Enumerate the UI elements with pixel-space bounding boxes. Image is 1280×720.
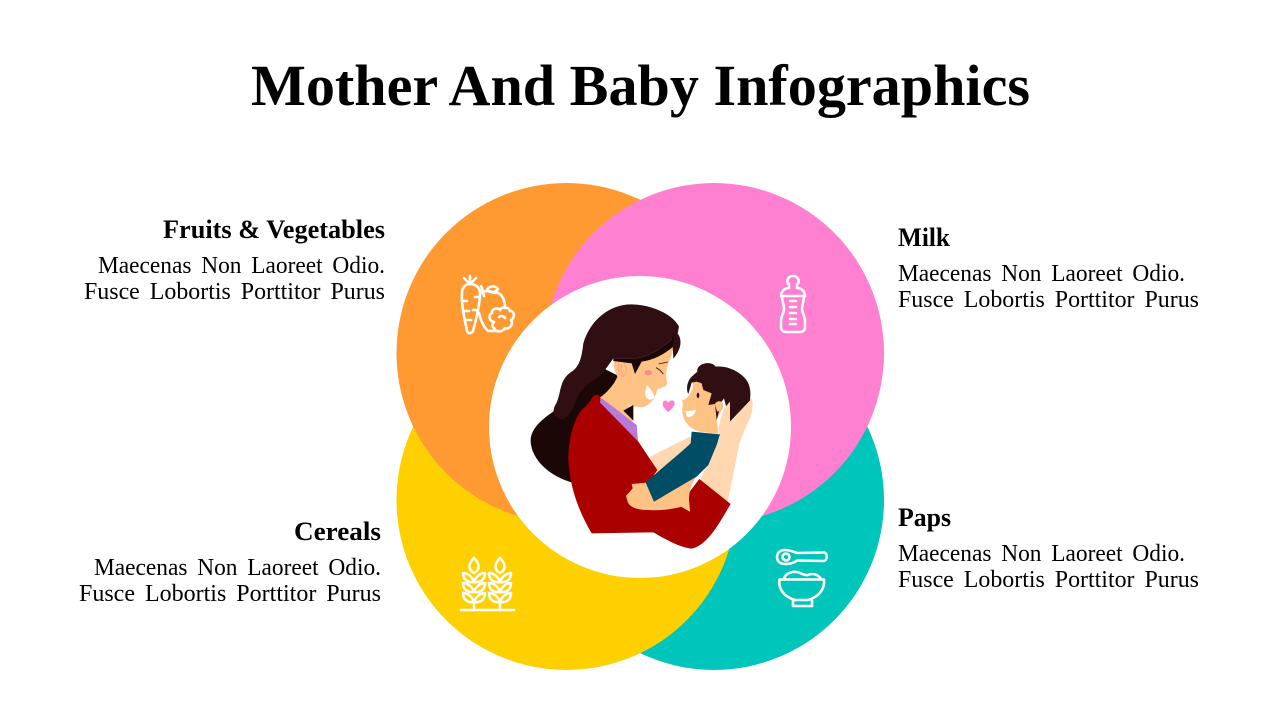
illustration: mother and baby xyxy=(531,304,753,549)
text block: paps: Maecenas Non Laoreet Odio. xyxy=(898,541,1185,567)
circle: milk pink xyxy=(544,183,884,523)
text block: fruits and vegetables: Fusce Lobortis Porttitor Purus xyxy=(84,279,385,305)
text block: milk: Milk xyxy=(898,223,951,252)
text block: fruits and vegetables: Fruits & Vegetables xyxy=(163,215,385,244)
title: Mother And Baby Infographics xyxy=(251,53,1030,118)
text block: fruits and vegetables xyxy=(84,215,385,305)
text block: paps xyxy=(898,503,1199,593)
text block: milk: Fusce Lobortis Porttitor Purus xyxy=(898,287,1199,313)
text block: milk xyxy=(898,223,1199,313)
icon: baby bottle xyxy=(781,276,805,332)
icon: wheat xyxy=(461,558,514,610)
circle: fruits orange xyxy=(396,183,736,523)
circle: cereals yellow xyxy=(396,330,736,670)
text block: cereals xyxy=(79,517,381,607)
text block: fruits and vegetables: Maecenas Non Laoreet Odio. xyxy=(98,253,385,279)
text block: paps: Fusce Lobortis Porttitor Purus xyxy=(898,567,1199,593)
text block: cereals: Fusce Lobortis Porttitor Purus xyxy=(79,581,381,607)
center white circle xyxy=(489,276,791,578)
text block: paps: Paps xyxy=(898,503,951,532)
icon: bowl and spoon xyxy=(777,550,827,606)
circle: paps teal xyxy=(544,330,884,670)
text block: cereals: Maecenas Non Laoreet Odio. xyxy=(94,555,381,581)
icon: carrot and fruits xyxy=(462,276,514,333)
text block: milk: Maecenas Non Laoreet Odio. xyxy=(898,261,1185,287)
text block: cereals: Cereals xyxy=(294,517,381,546)
